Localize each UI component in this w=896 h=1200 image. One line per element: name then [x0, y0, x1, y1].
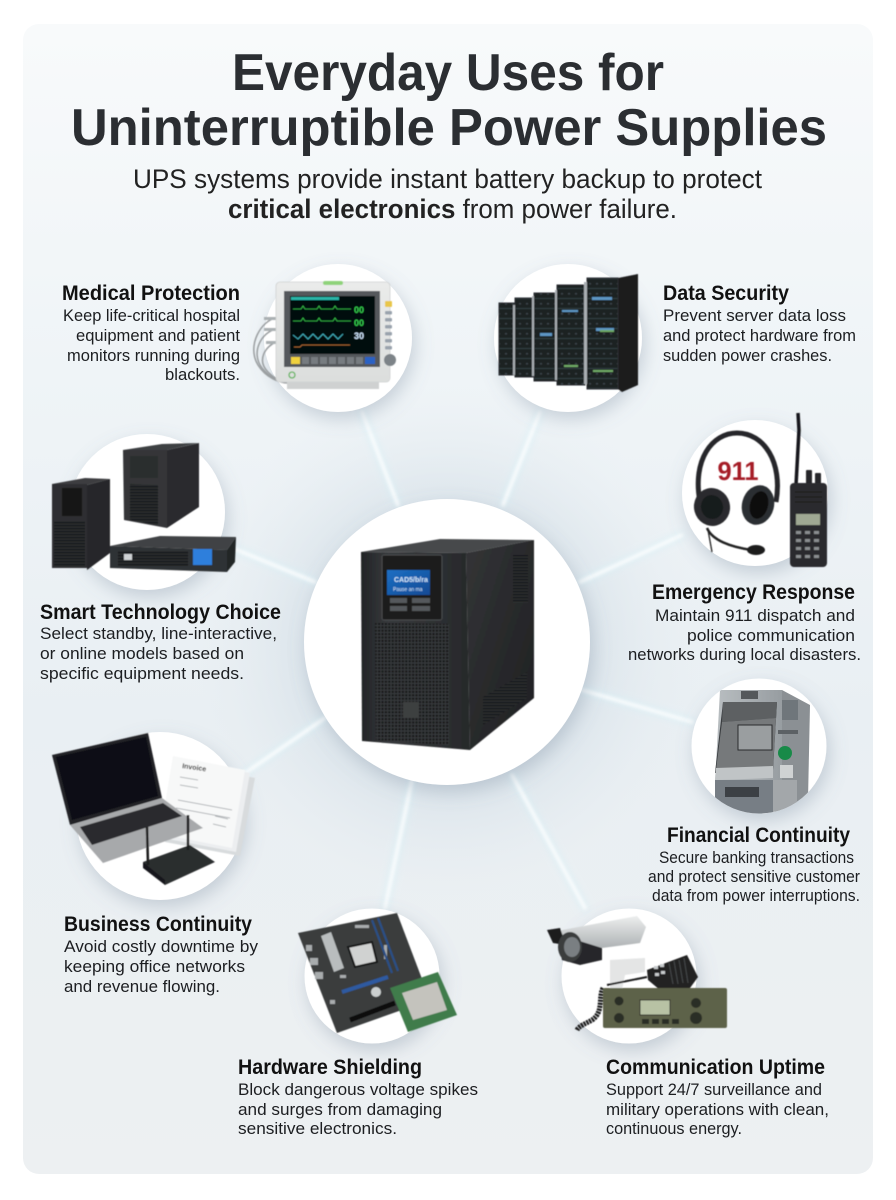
text: smart technology description: specific equipment needs. [40, 665, 244, 683]
panel: financial continuity [648, 678, 860, 905]
subtitle: critical electronics from power failure. [228, 194, 677, 224]
text: data security description: sudden power crashes. [663, 347, 832, 365]
text: business continuity description: keeping office networks [64, 958, 245, 976]
panel: medical protection [62, 264, 412, 412]
panel: emergency response [628, 413, 861, 664]
text: smart technology description: Select standby, line-interactive, [40, 625, 277, 643]
text: communication uptime description: military operations with clean, [606, 1101, 829, 1119]
text: financial continuity description: and protect sensitive customer [648, 868, 860, 886]
icon: server racks [499, 274, 638, 392]
text: hardware shielding description: and surges from damaging [238, 1101, 442, 1119]
text: financial continuity description: data from power interruptions. [652, 887, 860, 905]
text: business continuity description [64, 938, 259, 996]
icon: patient monitor: 30 [354, 331, 364, 341]
text: hardware shielding description [238, 1081, 478, 1138]
heading: business continuity: Business Continuity [64, 913, 252, 936]
text: emergency response description: police communication [687, 627, 855, 645]
text: medical protection description: monitors running during [67, 347, 240, 365]
text: smart technology description: or online models based on [40, 645, 244, 663]
icon: ATM [715, 690, 810, 816]
heading: medical protection: Medical Protection [62, 282, 240, 305]
text: financial continuity description: Secure banking transactions [659, 849, 854, 867]
icon: laptop, invoices and router [52, 733, 255, 885]
panel: hardware shielding [238, 908, 478, 1138]
panel: business continuity [52, 732, 259, 996]
text: emergency response description: Maintain 911 dispatch and [655, 607, 855, 625]
text: communication uptime description: continuous energy. [606, 1120, 742, 1138]
subtitle [133, 164, 762, 224]
heading: emergency response: Emergency Response [652, 581, 855, 604]
heading: financial continuity: Financial Continuity [667, 824, 850, 847]
text: data security description [663, 307, 856, 365]
hub: central UPS [304, 499, 590, 785]
heading: communication uptime: Communication Uptime [606, 1056, 825, 1079]
text: medical protection description [63, 307, 240, 384]
icon: tower UPS: CAD5/b/ra [394, 577, 428, 584]
text: smart technology description [40, 625, 277, 683]
heading: data security: Data Security [663, 282, 789, 305]
text: medical protection description: Keep life-critical hospital [63, 307, 240, 325]
text: business continuity description: and revenue flowing. [64, 978, 220, 996]
text: hardware shielding description: Block dangerous voltage spikes [238, 1081, 478, 1099]
icon: headset and radio [690, 413, 827, 567]
text: communication uptime description [606, 1081, 829, 1138]
icon: patient monitor: 00 [354, 305, 364, 315]
icon: tower UPS [361, 539, 534, 750]
subtitle: UPS systems provide instant battery backup to protect [133, 164, 762, 194]
icon: UPS product range [52, 443, 236, 572]
icon label: 911: 911 [718, 456, 758, 486]
text: medical protection description: blackouts. [165, 366, 240, 384]
heading: hardware shielding: Hardware Shielding [238, 1056, 422, 1079]
text: financial continuity description [648, 849, 860, 905]
text: communication uptime description: Support 24/7 surveillance and [606, 1081, 822, 1099]
icon: patient monitor [254, 281, 396, 389]
central glow [187, 385, 707, 905]
panel: data security [494, 264, 856, 412]
text: emergency response description [628, 607, 861, 664]
text: emergency response description: networks during local disasters. [628, 646, 861, 664]
title: Everyday Uses for [232, 44, 664, 102]
icon: laptop, invoices and router: Invoice [182, 763, 207, 773]
connector rays [225, 412, 692, 908]
panel: communication uptime [547, 908, 829, 1138]
panel: smart technology choice [40, 434, 281, 683]
heading: smart technology choice: Smart Technology Choice [40, 601, 281, 624]
text: business continuity description: Avoid costly downtime by [64, 938, 259, 956]
icon: motherboard and CPU [298, 913, 457, 1033]
icon: tower UPS: Pause an ma [393, 587, 423, 593]
text: hardware shielding description: sensitive electronics. [238, 1120, 397, 1138]
title [71, 44, 827, 157]
icon: security camera and military radio [547, 916, 727, 1030]
text: medical protection description: equipment and patient [76, 327, 240, 345]
text: data security description: and protect hardware from [663, 327, 856, 345]
title: Uninterruptible Power Supplies [71, 99, 827, 157]
text: data security description: Prevent server data loss [663, 307, 846, 325]
icon: patient monitor: 00 [354, 318, 364, 328]
